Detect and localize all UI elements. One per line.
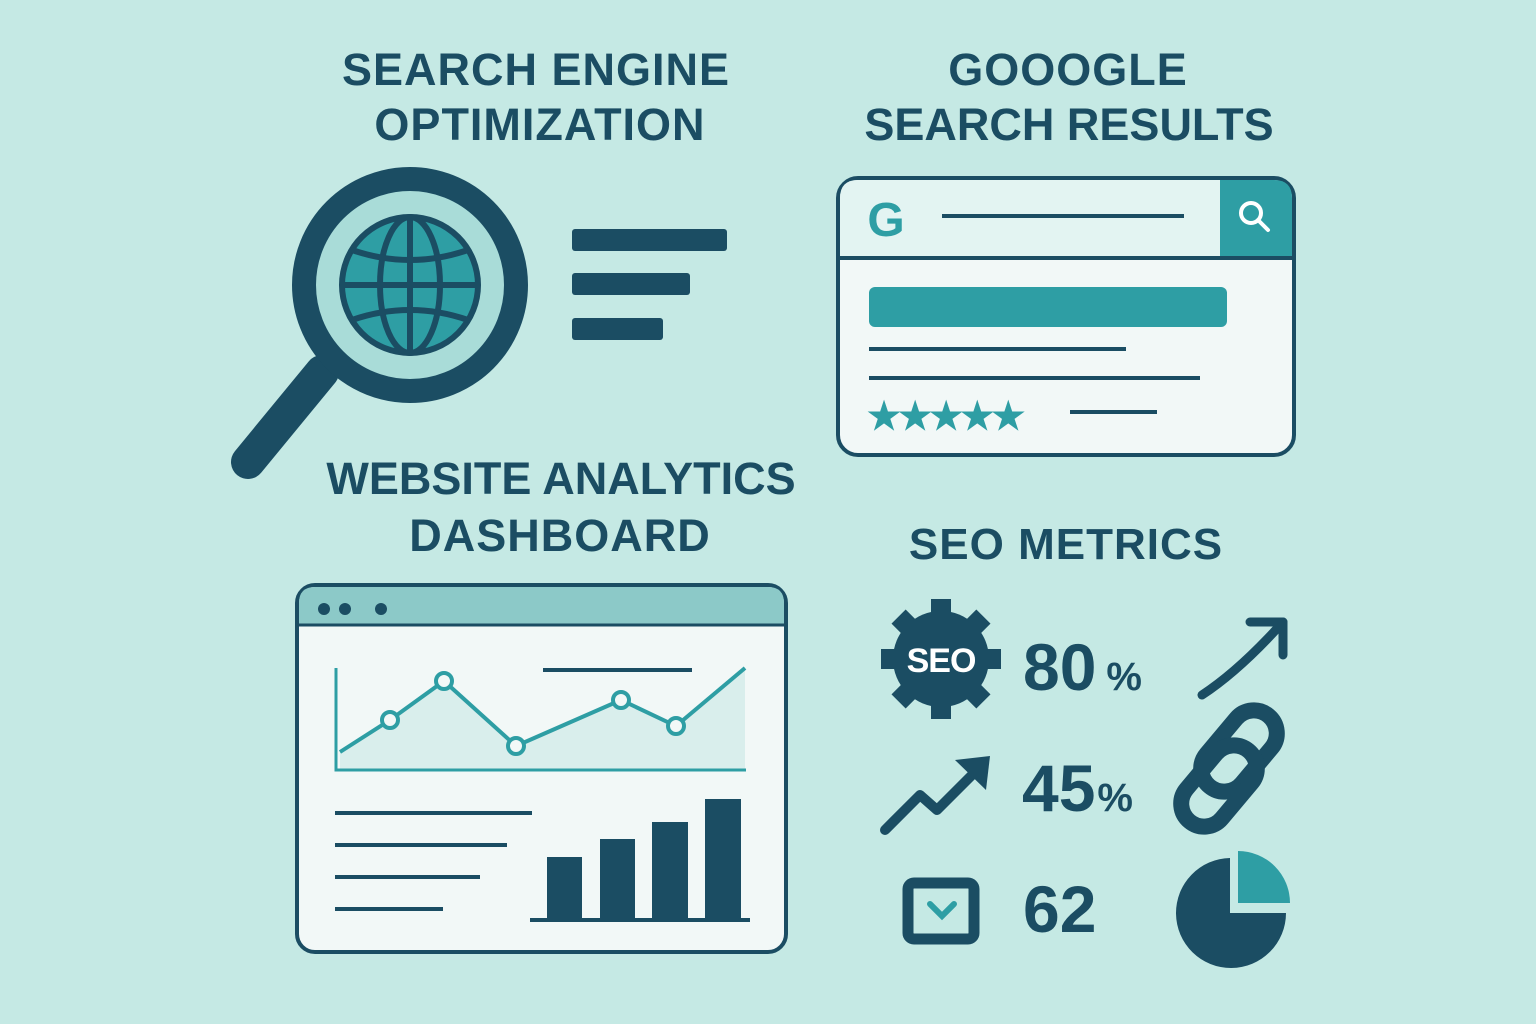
stat: 80%: 80% xyxy=(1023,630,1142,704)
panel: analytics dashboard xyxy=(297,585,786,952)
title: website analytics dashboard: DASHBOARD xyxy=(409,510,711,561)
panel: google search results xyxy=(838,178,1294,455)
panel: google search results: G xyxy=(867,194,905,247)
icon: checkbox xyxy=(908,883,974,939)
title: search engine optimization: SEARCH ENGINE xyxy=(342,44,730,95)
title: website analytics dashboard xyxy=(326,453,796,561)
title: seo metrics: SEO METRICS xyxy=(909,520,1223,569)
title: search engine optimization xyxy=(342,44,730,150)
panel: google search results: ★★★★★ xyxy=(867,396,1025,438)
title: website analytics dashboard: WEBSITE ANALYTICS xyxy=(326,453,796,504)
icon: pie chart xyxy=(1176,851,1290,968)
icon: text bars xyxy=(572,229,727,340)
title: google search results xyxy=(864,44,1274,150)
panel: seo metrics xyxy=(881,599,1290,968)
title: search engine optimization: OPTIMIZATION xyxy=(374,99,706,150)
icon: magnifier with globe xyxy=(248,179,516,462)
icon: seo gear: SEO xyxy=(907,642,976,680)
icon: trend arrow xyxy=(885,756,990,830)
icon: seo gear xyxy=(881,599,1001,719)
title: google search results: SEARCH RESULTS xyxy=(864,99,1274,150)
icon: up arrow xyxy=(1202,622,1283,695)
stat: 45%: 45% xyxy=(1022,751,1133,825)
icon: chain link xyxy=(1172,701,1286,836)
stat: 62: 62 xyxy=(1023,872,1096,946)
title: google search results: GOOOGLE xyxy=(948,44,1188,95)
